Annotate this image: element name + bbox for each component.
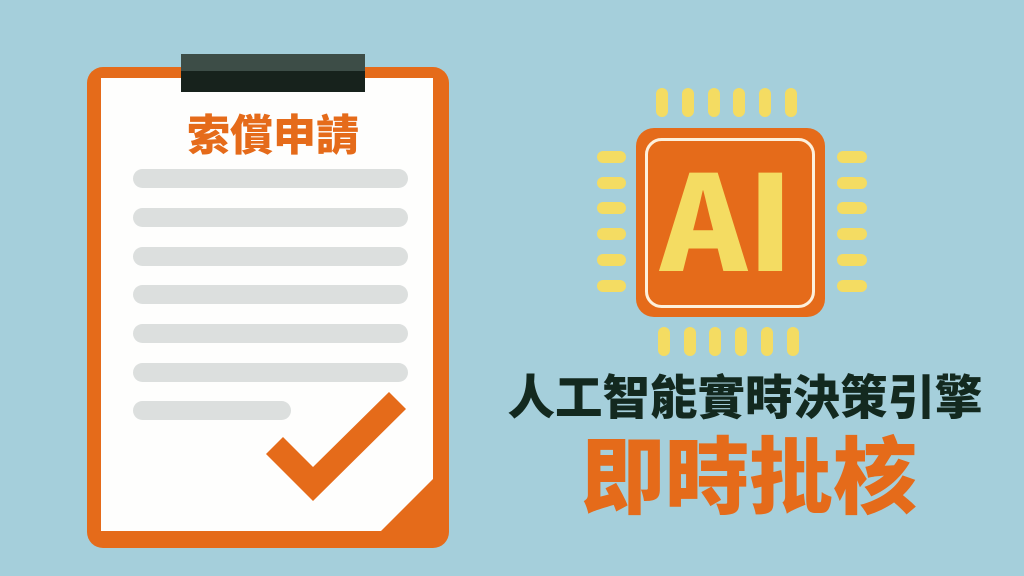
form text lines [133,169,408,420]
form title: 索償申請 [187,102,359,164]
clip [181,54,365,92]
icon: check mark [266,392,406,501]
clipboard board [87,67,449,548]
chip body [636,128,825,317]
chip inner outline [646,140,814,306]
clipboard [87,54,449,548]
chip label: AI [658,119,793,310]
icon: AI chip [597,88,867,356]
paper sheet [101,78,433,531]
heading: 人工智能實時決策引擎 [508,360,982,428]
chip pins [597,88,867,356]
subheading: 即時批核 [581,411,917,532]
